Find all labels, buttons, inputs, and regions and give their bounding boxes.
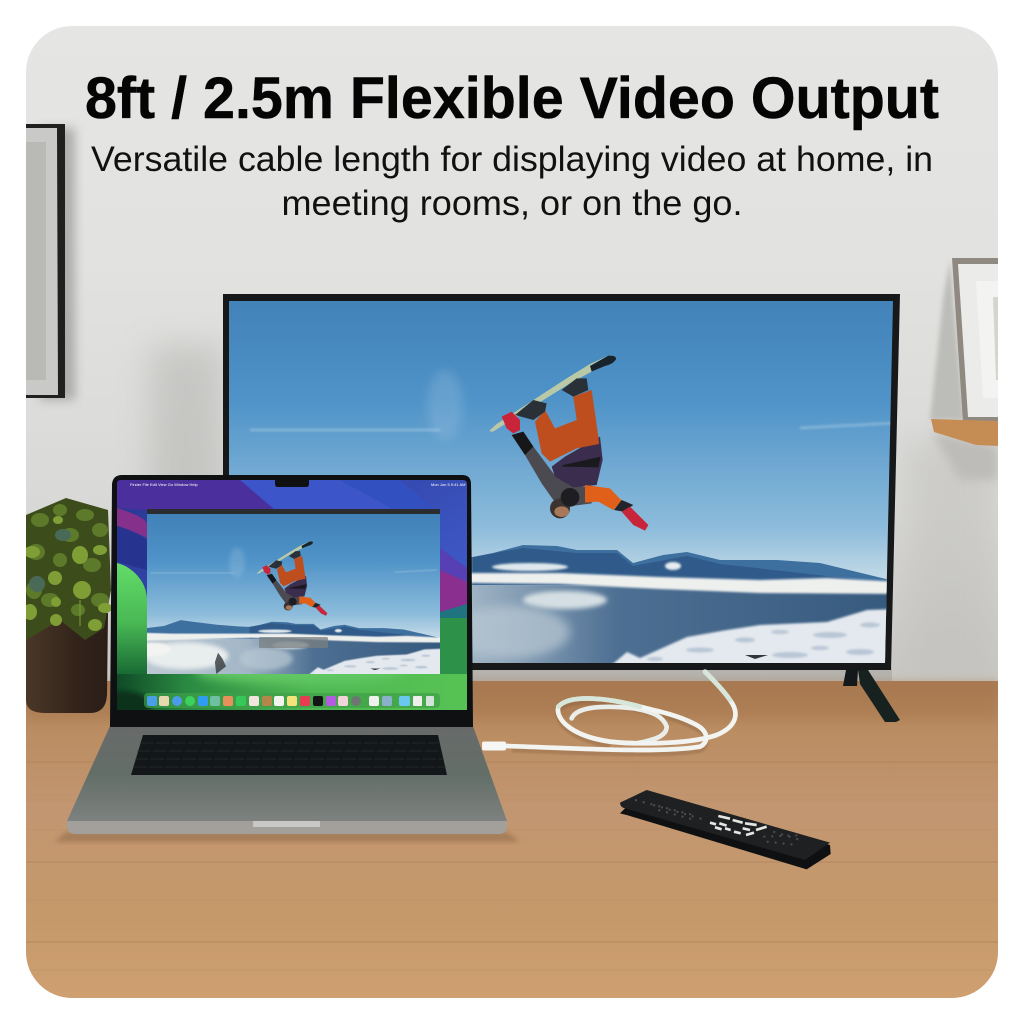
plant [23, 498, 112, 713]
plant foliage [23, 498, 112, 640]
subtitle: meeting rooms, or on the go. [282, 183, 742, 223]
plant pot [26, 613, 108, 713]
left wall frame [20, 124, 75, 400]
TV screen [229, 301, 893, 663]
laptop wallpaper [117, 480, 467, 710]
remote control [620, 790, 831, 869]
dock [144, 693, 440, 708]
laptop window [147, 509, 440, 674]
laptop thumb notch [253, 821, 320, 827]
TV frame [223, 294, 900, 670]
TV stand front leg [858, 670, 900, 722]
desk [26, 681, 998, 998]
TV stand back leg [843, 670, 858, 686]
menu bar: Mon Jun 5 9:41 AM [431, 482, 465, 487]
cable shadow [512, 702, 706, 754]
menu bar [130, 484, 466, 487]
camera notch [275, 480, 309, 487]
video controls [259, 637, 328, 648]
shelf [931, 419, 998, 446]
right wall frame and shelf [930, 258, 1005, 480]
laptop shadow [55, 832, 520, 842]
white cable [507, 672, 735, 750]
TV [200, 280, 920, 722]
subtitle: Versatile cable length for displaying video at home, in [91, 139, 933, 179]
laptop base [67, 726, 507, 833]
subtitle [91, 139, 933, 223]
menu bar: Finder File Edit View Go Window Help [130, 482, 199, 487]
title: 8ft / 2.5m Flexible Video Output [85, 66, 939, 131]
laptop lid [110, 475, 473, 727]
cable connector [482, 742, 506, 750]
laptop front lip [67, 821, 507, 834]
laptop [55, 475, 520, 842]
wall [26, 26, 998, 682]
keyboard [131, 735, 447, 775]
